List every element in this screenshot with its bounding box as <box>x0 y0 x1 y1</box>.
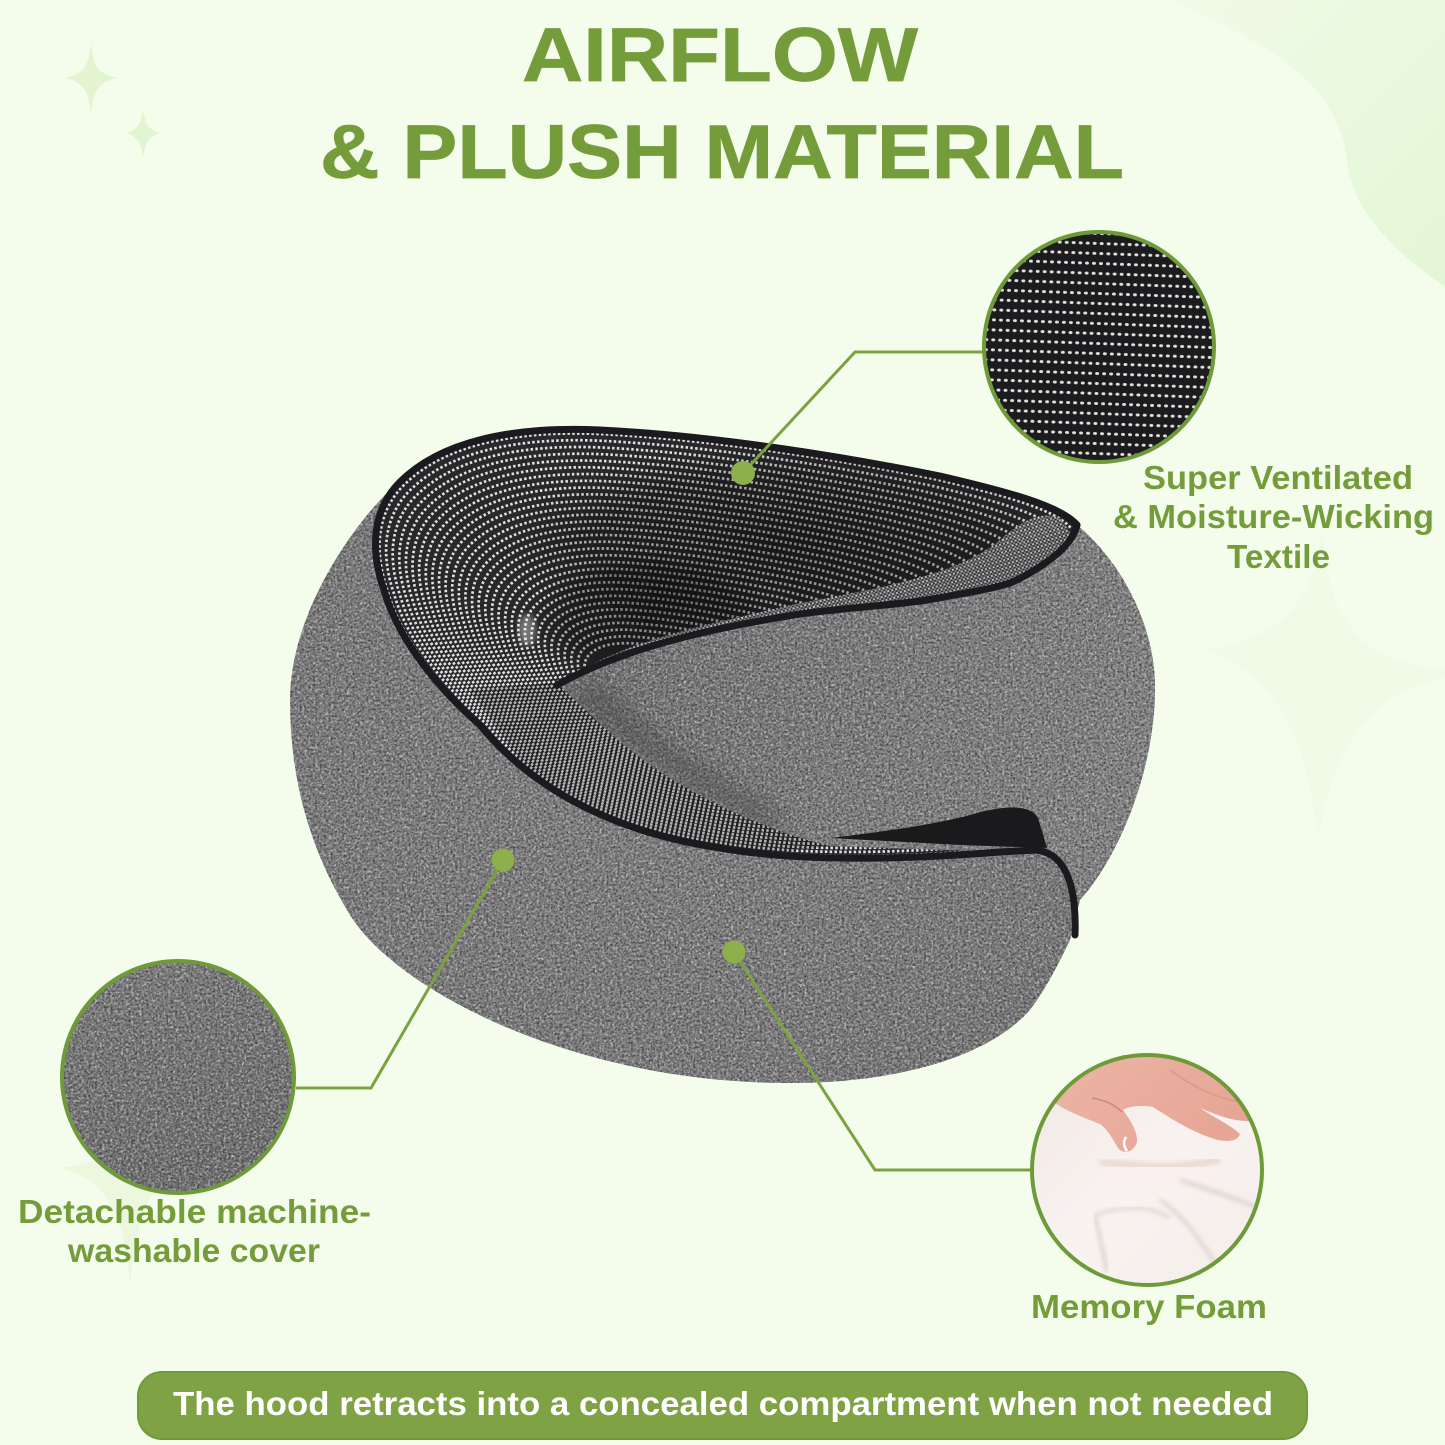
mesh hood <box>379 432 1073 855</box>
label: washable cover <box>18 1193 371 1269</box>
connector: ventilated textile <box>731 352 985 485</box>
pillow body <box>290 493 1155 1083</box>
retractable strap <box>830 808 1047 848</box>
decorative blob top right <box>1172 0 1445 287</box>
faint sparkle bottom left <box>60 1130 180 1285</box>
label: memory foam: Memory Foam <box>1031 1288 1267 1325</box>
title: & PLUSH MATERIAL <box>320 110 1124 195</box>
fold shadow <box>565 680 790 838</box>
sparkle icons top left <box>65 42 161 158</box>
callout: fabric cover circle <box>62 961 294 1193</box>
label: ventilated textile: Super Ventilated <box>1143 459 1413 496</box>
bottom banner <box>138 1372 1307 1439</box>
callout: mesh textile circle <box>984 232 1214 462</box>
neck pillow <box>290 420 1155 1083</box>
label: washable cover: washable cover <box>67 1232 320 1269</box>
connector: memory foam <box>722 940 1030 1170</box>
title: AIRFLOW <box>522 13 918 98</box>
hood trim <box>376 429 1077 935</box>
connector: washable cover <box>296 848 514 1088</box>
title <box>320 13 1124 195</box>
bottom banner: The hood retracts into a concealed compartment when not needed <box>173 1385 1273 1422</box>
callout: memory foam circle <box>1032 1040 1270 1285</box>
rear lobe <box>557 525 1155 900</box>
label: ventilated textile: Textile <box>1227 538 1330 575</box>
faint large sparkle right <box>1205 530 1445 840</box>
label: ventilated textile: & Moisture-Wicking <box>1113 498 1434 535</box>
label: ventilated textile <box>1113 459 1434 575</box>
label: washable cover: Detachable machine- <box>18 1193 371 1230</box>
